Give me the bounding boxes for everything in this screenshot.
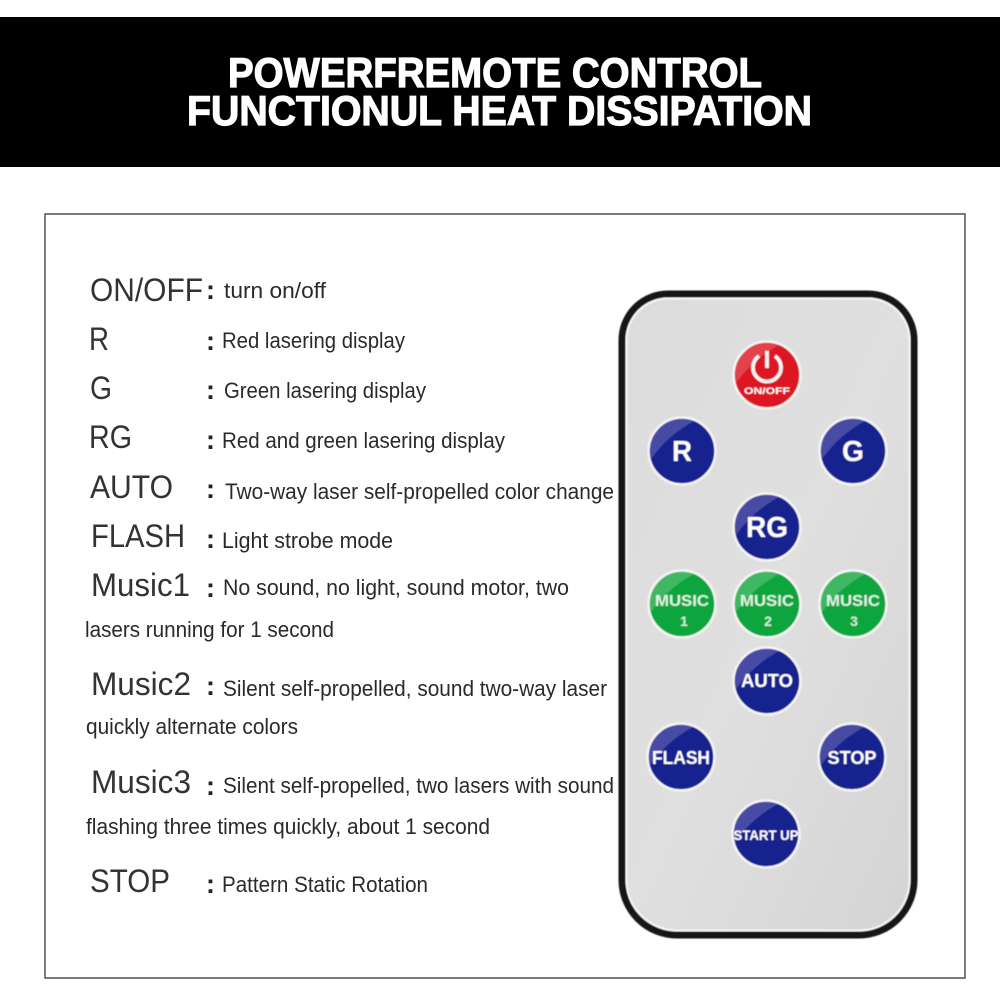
button: music 3: 3 [850, 613, 858, 629]
text block: button functions: : [206, 573, 215, 603]
text block: button functions: : [206, 425, 215, 455]
text block: button functions: Music1 [91, 567, 190, 603]
button: music 2: 2 [764, 613, 772, 629]
text block: button functions: : [206, 326, 215, 356]
title: POWERFREMOTE CONTROL [228, 49, 762, 96]
button: music 1: 1 [680, 613, 688, 629]
text block: button functions: Silent self-propelled, sound two-way laser [223, 676, 607, 701]
text block: button functions: Green lasering display [224, 378, 426, 403]
header banner [0, 17, 1000, 167]
text block: button functions: Pattern Static Rotation [222, 872, 428, 897]
button: RG [734, 494, 800, 560]
button: R: R [672, 436, 692, 468]
text block: button functions: : [206, 671, 215, 701]
button: on/off [734, 342, 800, 408]
button: G: G [842, 436, 864, 468]
text block: button functions: Music2 [91, 666, 191, 702]
text block: button functions: STOP [90, 863, 170, 899]
text block: button functions: : [206, 474, 215, 504]
text block: button functions: : [206, 375, 215, 405]
button: music 3 [820, 570, 886, 638]
text block: button functions: : [206, 275, 215, 305]
text block: button functions: : [206, 524, 215, 554]
button: music 1 [648, 570, 716, 638]
panel: function list and remote [45, 214, 965, 978]
text block: button functions: R [89, 321, 109, 357]
button: on/off: ON/OFF [744, 386, 790, 397]
text block: button functions: quickly alternate colors [86, 714, 298, 739]
text block: button functions: Red and green lasering display [222, 428, 505, 453]
text block: button functions: Two-way laser self-propelled color change [225, 479, 614, 504]
button: auto: AUTO [741, 671, 793, 691]
text block: button functions: No sound, no light, sound motor, two [223, 575, 569, 600]
button: start up [732, 800, 800, 868]
title [187, 49, 812, 134]
text block: button functions: ON/OFF [90, 272, 203, 308]
button: flash: FLASH [652, 748, 710, 768]
text block: button functions: RG [89, 419, 132, 455]
text block: button functions: : [206, 771, 215, 801]
text block: button functions: Music3 [91, 764, 191, 800]
text block: button functions: G [90, 370, 112, 406]
text block: button functions: AUTO [90, 469, 173, 505]
text block: button functions: flashing three times quickly, about 1 second [86, 814, 490, 839]
button: flash [648, 724, 714, 790]
text block: button functions: lasers running for 1 second [85, 617, 334, 642]
button: music 3: MUSIC [826, 593, 880, 610]
text block: button functions: Light strobe mode [222, 528, 393, 553]
button: music 2: MUSIC [740, 593, 794, 610]
button: music 2 [734, 570, 800, 638]
text block: button functions: Silent self-propelled, two lasers with sound [223, 773, 614, 798]
text block: button functions: FLASH [91, 518, 185, 554]
remote control [622, 294, 914, 935]
button: stop [818, 724, 886, 790]
text block: button functions: : [206, 869, 215, 899]
button: RG: RG [746, 512, 788, 544]
text block: button functions [85, 272, 614, 899]
button: stop: STOP [828, 748, 876, 768]
button: start up: START UP [734, 827, 798, 843]
button: music 1: MUSIC [655, 593, 709, 610]
button: auto [734, 648, 800, 714]
title: FUNCTIONUL HEAT DISSIPATION [187, 87, 812, 134]
button: G [820, 418, 886, 484]
text block: button functions: Red lasering display [222, 328, 405, 353]
text block: button functions: turn on/off [224, 278, 327, 303]
button: R [648, 418, 716, 484]
